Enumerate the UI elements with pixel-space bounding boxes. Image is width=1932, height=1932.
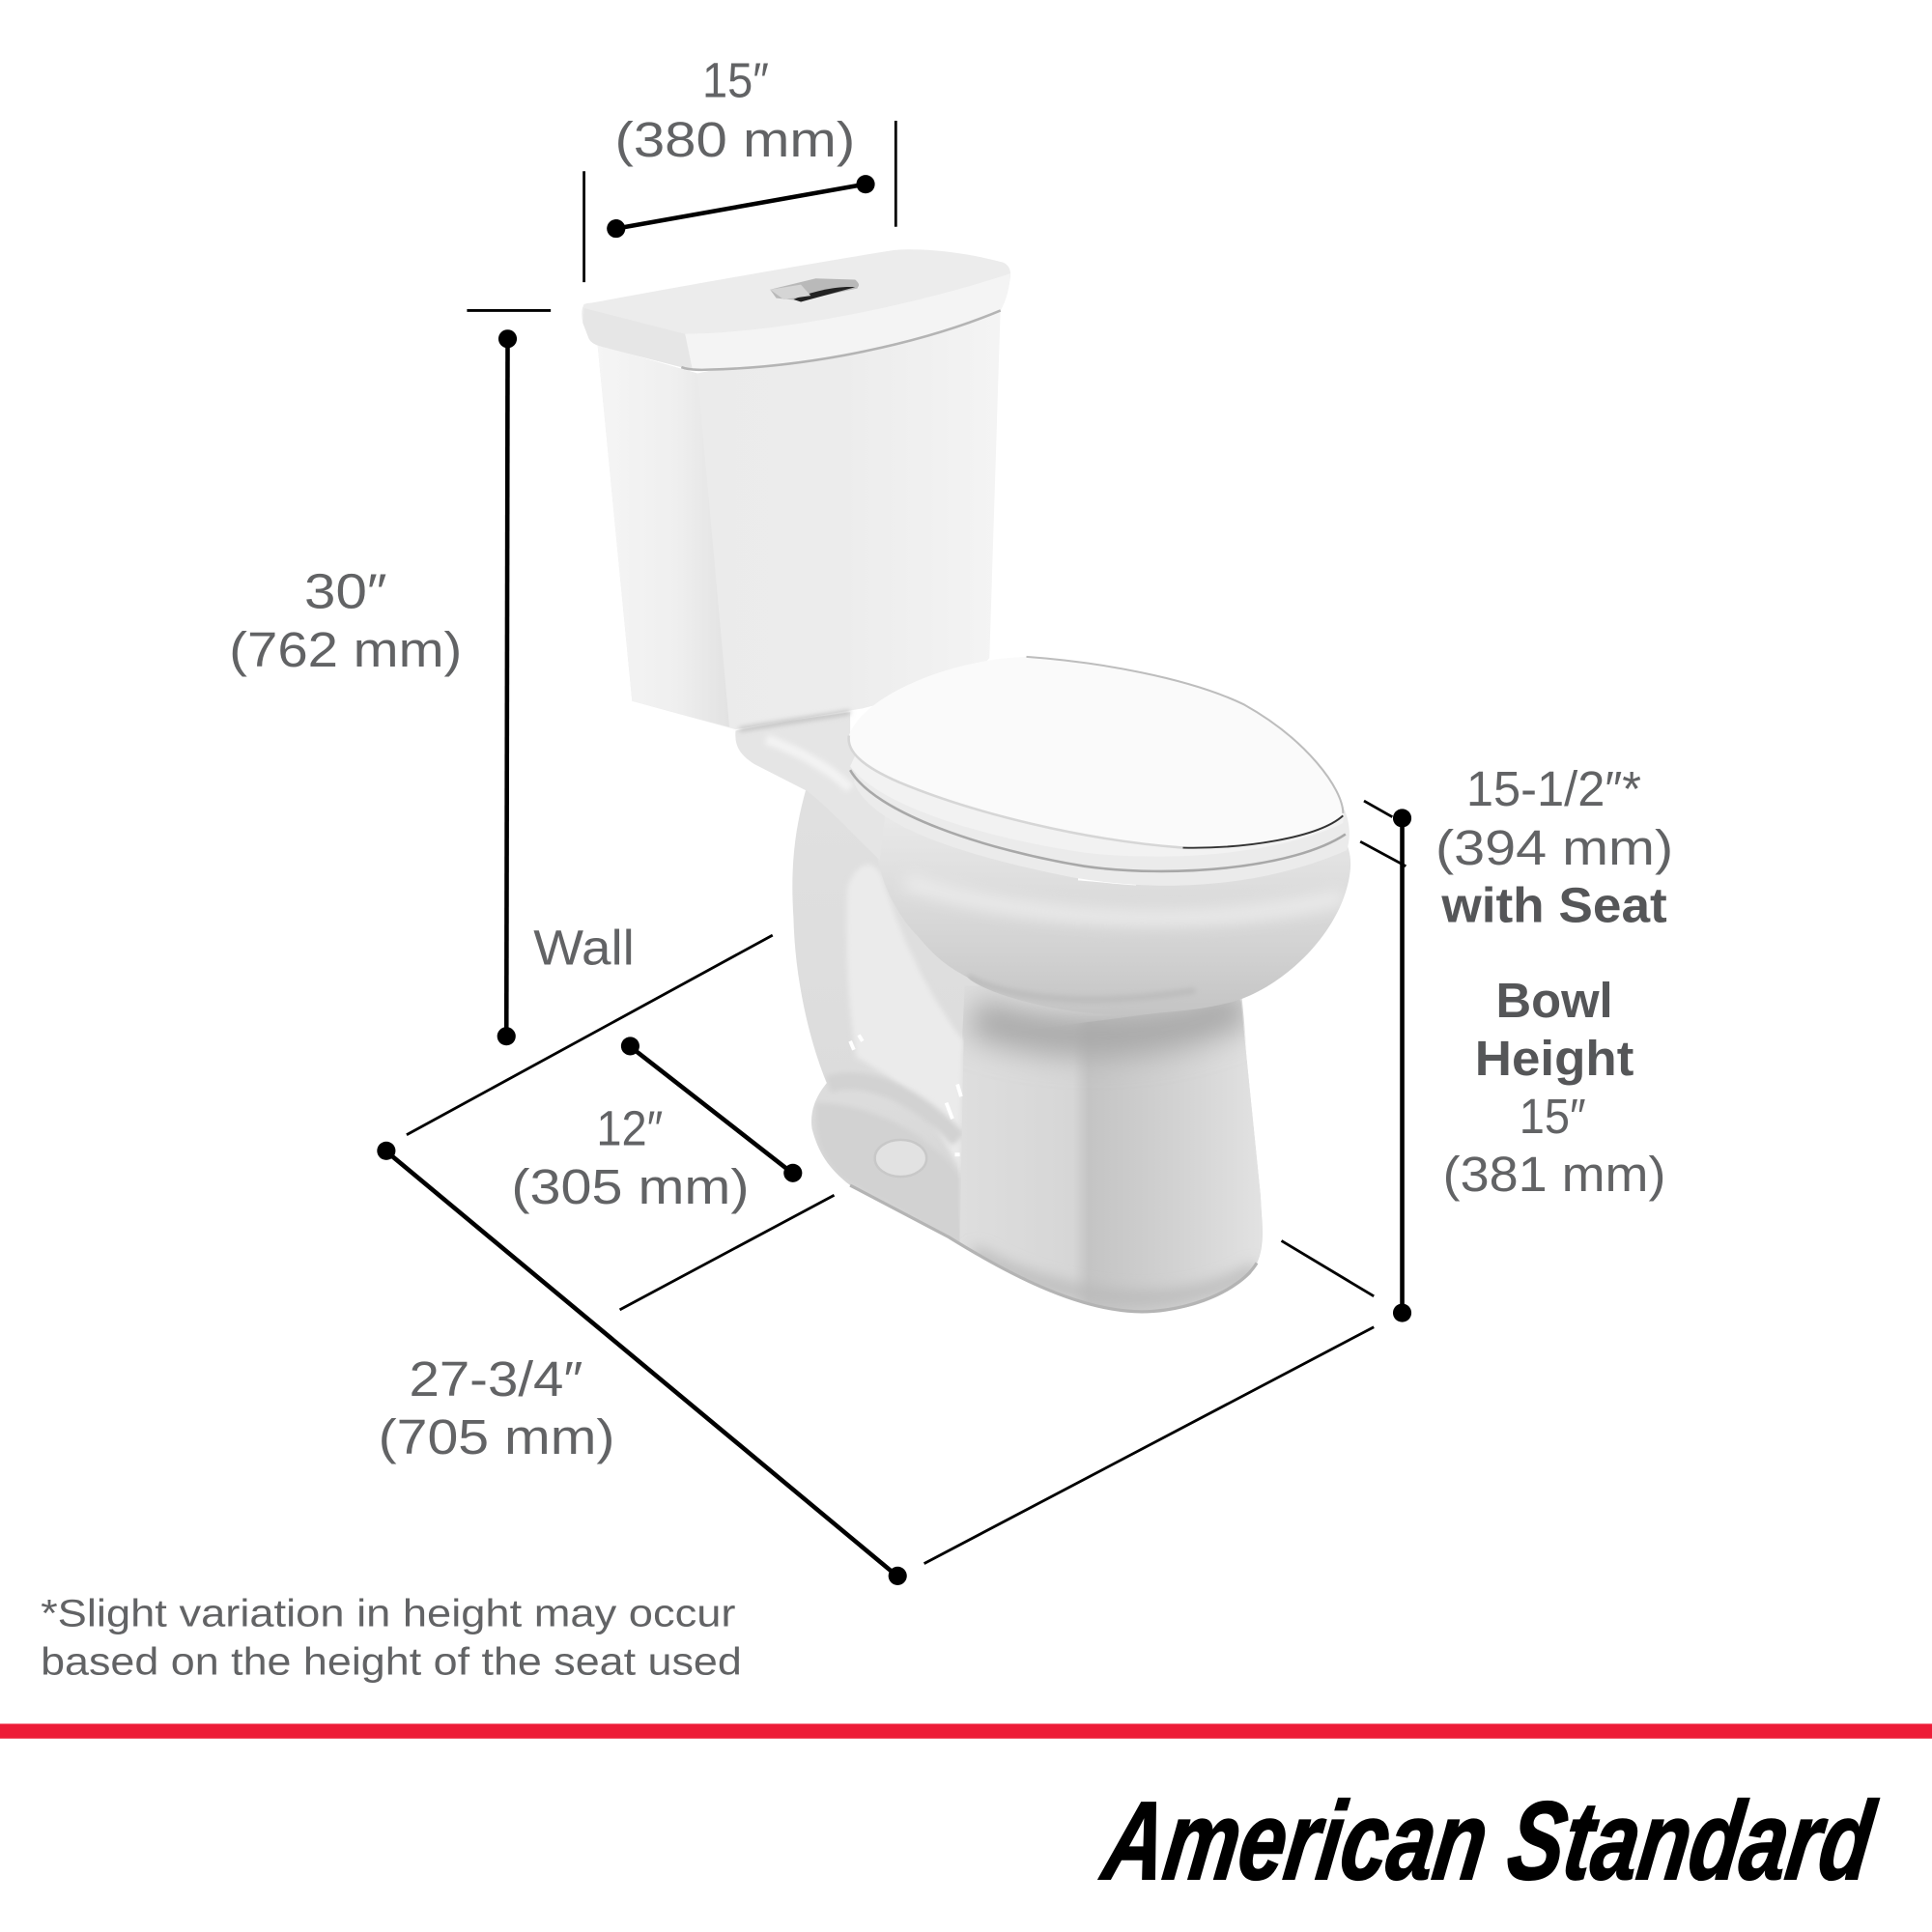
dimension: bowl height: 15-1/2″*: [1466, 761, 1641, 816]
tank lid with flush button: [582, 249, 1010, 370]
dimension: depth 27-3/4 in: (705 mm): [379, 1409, 614, 1464]
seat and lid: [735, 657, 1350, 886]
dimension: bowl height: (394 mm): [1435, 820, 1673, 875]
dimension: overall height 30 in: 30″: [304, 563, 387, 618]
dimension: tank width 15 in: 15″: [702, 53, 769, 108]
toilet illustration: [582, 249, 1350, 1312]
dimension: bowl height: [1360, 761, 1673, 1322]
dimension: overall height 30 in: [229, 310, 551, 1045]
footnote: based on the height of the seat used: [41, 1640, 742, 1683]
footnote: [41, 1593, 742, 1683]
flush button: [770, 278, 859, 301]
red divider bar: [0, 1723, 1932, 1739]
dimension: rough-in 12 in: 12″: [596, 1101, 663, 1156]
dimension: bowl height: Height: [1475, 1031, 1634, 1086]
tank: [598, 308, 1001, 729]
toilet base and trapway: [792, 790, 1263, 1312]
dimension: depth 27-3/4 in: [377, 1142, 1374, 1585]
dimension: bowl height: 15″: [1520, 1089, 1586, 1144]
dimension: tank width 15 in: [584, 53, 895, 282]
dimension: rough-in 12 in: (305 mm): [511, 1159, 750, 1214]
dimension: depth 27-3/4 in: 27-3/4″: [409, 1351, 582, 1406]
dimension: overall height 30 in: (762 mm): [229, 622, 462, 677]
dimension: bowl height: Bowl: [1495, 973, 1613, 1028]
dimension: bowl height: (381 mm): [1443, 1147, 1665, 1202]
bowl: [885, 816, 1350, 1012]
footnote: *Slight variation in height may occur: [41, 1593, 735, 1635]
dimension: rough-in 12 in: [407, 935, 835, 1310]
dimension: tank width 15 in: (380 mm): [614, 112, 855, 167]
dimension: bowl height: with Seat: [1440, 878, 1667, 933]
label: wall: Wall: [533, 921, 635, 976]
